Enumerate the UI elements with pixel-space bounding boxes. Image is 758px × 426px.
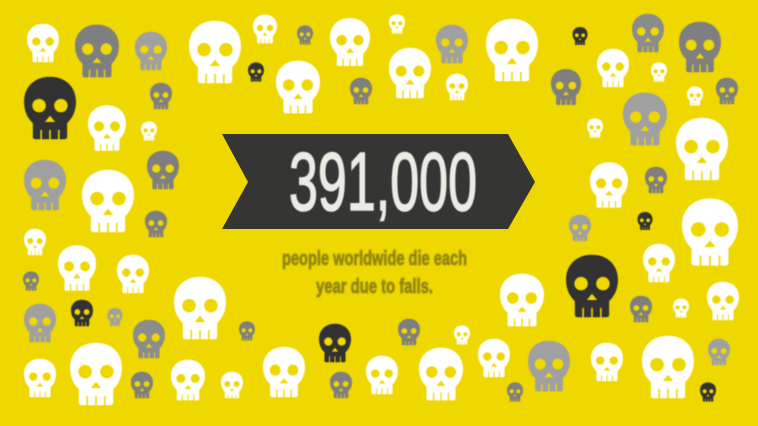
skull xyxy=(651,62,667,82)
skull xyxy=(572,27,588,45)
skull xyxy=(419,348,463,400)
caption: people worldwide die each xyxy=(282,248,467,270)
skull xyxy=(716,78,738,104)
skull xyxy=(673,298,689,318)
skull xyxy=(297,25,313,45)
skull xyxy=(478,339,510,377)
skull xyxy=(642,336,694,398)
skull xyxy=(221,372,243,398)
skull xyxy=(239,321,255,341)
skull xyxy=(350,78,372,104)
skull xyxy=(189,21,241,83)
skull xyxy=(24,304,56,342)
skull xyxy=(643,244,675,282)
skull xyxy=(623,93,667,145)
skull xyxy=(632,14,664,52)
skull xyxy=(108,308,122,326)
skull xyxy=(566,255,618,317)
skull xyxy=(389,48,431,98)
skull xyxy=(174,277,226,339)
skull xyxy=(253,15,277,43)
skull xyxy=(569,215,591,241)
skull xyxy=(630,296,652,322)
skull xyxy=(676,118,728,180)
skull xyxy=(171,360,205,400)
skull xyxy=(454,325,470,345)
skull xyxy=(507,382,523,402)
skull xyxy=(24,229,46,255)
caption xyxy=(282,248,467,298)
skull xyxy=(24,77,76,139)
skull xyxy=(551,69,581,105)
skull xyxy=(590,162,628,208)
skull xyxy=(75,25,119,77)
skull xyxy=(436,25,468,63)
skull xyxy=(23,271,39,291)
skull xyxy=(682,198,738,266)
skull xyxy=(687,86,703,106)
skull xyxy=(330,18,370,66)
skull xyxy=(24,359,56,397)
skull xyxy=(500,274,544,326)
skull xyxy=(597,49,629,87)
skull xyxy=(147,151,179,189)
skull xyxy=(528,341,570,391)
skull xyxy=(24,160,66,210)
skull xyxy=(679,22,721,72)
skull xyxy=(330,372,352,398)
skull xyxy=(276,61,320,113)
skull xyxy=(133,320,165,358)
skull xyxy=(638,212,652,230)
skull xyxy=(707,282,739,320)
skull xyxy=(486,19,538,81)
skull xyxy=(145,211,167,237)
skull xyxy=(587,118,603,138)
skull xyxy=(700,382,716,402)
skull xyxy=(141,121,157,141)
skull xyxy=(27,24,59,62)
skull xyxy=(366,356,398,394)
skull xyxy=(70,343,122,405)
skull xyxy=(135,32,167,70)
banner xyxy=(222,134,535,229)
skull xyxy=(263,347,305,397)
headline number: 391,000 xyxy=(289,135,477,228)
skull xyxy=(82,170,134,232)
skull xyxy=(131,372,153,398)
skull xyxy=(708,339,730,365)
skull xyxy=(645,167,667,193)
skull xyxy=(150,83,172,109)
skull xyxy=(398,319,420,345)
skull xyxy=(389,14,405,34)
skull xyxy=(88,105,126,151)
skull xyxy=(446,74,468,100)
skull xyxy=(319,324,351,362)
skull xyxy=(117,255,149,293)
skull xyxy=(591,343,623,381)
skull xyxy=(248,62,264,82)
caption: year due to falls. xyxy=(316,276,433,298)
skull xyxy=(58,245,96,291)
skull xyxy=(71,300,93,326)
